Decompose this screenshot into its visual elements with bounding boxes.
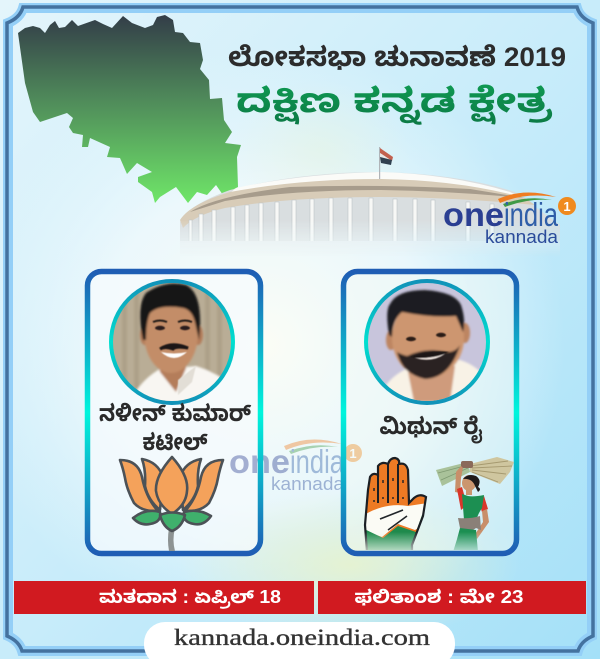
panel border: candidate 1: [88, 272, 260, 554]
icon: Congress hand: [364, 456, 428, 550]
panel border: candidate 2: [344, 272, 516, 554]
parliament building: [180, 172, 560, 250]
candidate 2 name: ಮಿಥುನ್ ರೈ: [380, 413, 483, 444]
portrait: Nalin Kumar Kateel: [109, 279, 235, 405]
portrait: Mithun Rai: [364, 279, 490, 405]
banner: result date: [318, 581, 586, 614]
watermark logo: kannada: [271, 474, 345, 494]
banner: polling date: [14, 581, 314, 614]
panel fill: candidate 1: [88, 272, 260, 553]
watermark logo: 1: [349, 446, 357, 461]
map of constituency: [18, 15, 241, 203]
flag: [379, 147, 393, 179]
banner: polling date: ಮತದಾನ : ಏಪ್ರಿಲ್ 18: [99, 587, 281, 609]
watermark logo: one: [229, 443, 290, 480]
logo: oneindia kannada: india: [504, 196, 558, 233]
website pill: kannada.oneindia.com: [174, 625, 430, 650]
logo: oneindia kannada: [443, 192, 576, 247]
main title line 2: ದಕ್ಷಿಣ ಕನ್ನಡ ಕ್ಷೇತ್ರ: [236, 82, 553, 125]
main title line 1: ಲೋಕಸಭಾ ಚುನಾವಣೆ 2019: [228, 42, 566, 72]
watermark logo: india: [290, 443, 344, 480]
icon: woman with paddy: [436, 457, 514, 552]
icon: BJP lotus: [120, 457, 223, 551]
logo: oneindia kannada: one: [443, 196, 504, 233]
logo: oneindia kannada: kannada: [485, 227, 559, 247]
logo: oneindia kannada: 1: [563, 199, 571, 214]
panel fill: candidate 2: [344, 272, 516, 553]
candidate 1 surname: ಕಟೀಲ್: [142, 429, 208, 455]
banner: result date: ಫಲಿತಾಂಶ : ಮೇ 23: [354, 587, 524, 607]
website pill: [144, 622, 455, 659]
watermark logo: [229, 439, 362, 494]
candidate 1 name: ನಳೀನ್ ಕುಮಾರ್: [99, 400, 252, 426]
